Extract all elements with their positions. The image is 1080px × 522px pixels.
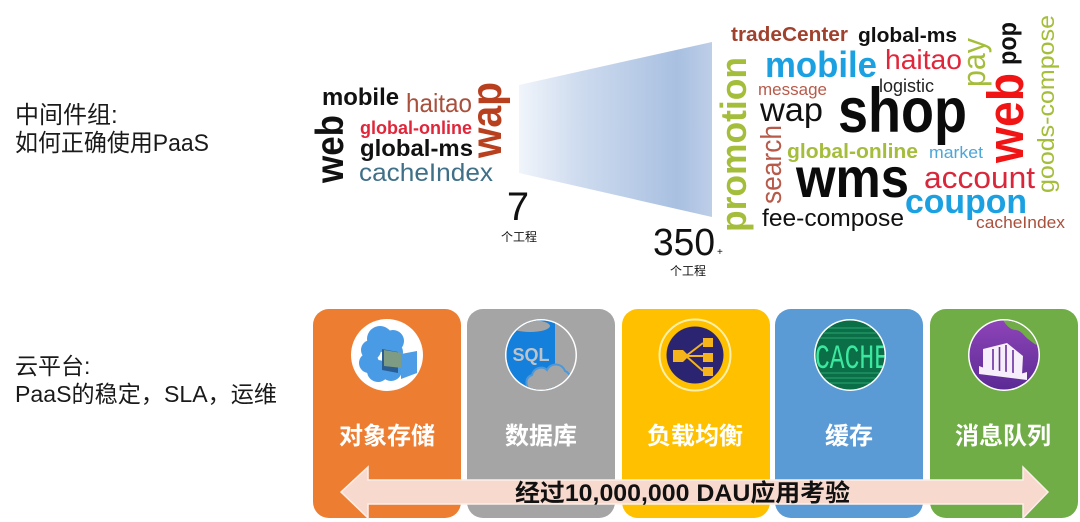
word cloud: 350+ projects: wms <box>795 146 909 209</box>
icon: SQL cloud <box>505 319 577 392</box>
word cloud: 350+ projects: message <box>758 80 827 99</box>
stat: 350+ projects: + <box>717 247 723 258</box>
heading: middleware group: 中间件组: <box>15 102 118 129</box>
heading: cloud platform <box>15 353 277 407</box>
stat: 7 projects <box>501 185 537 244</box>
label: message queue: 消息队列 <box>955 423 1051 450</box>
word cloud: 7 projects: cacheIndex <box>359 159 494 187</box>
word cloud: 350+ projects: promotion <box>713 57 754 232</box>
word cloud: 7 projects <box>309 82 511 187</box>
word cloud: 350+ projects: tradeCenter <box>731 24 848 46</box>
word cloud: 350+ projects: market <box>929 143 983 162</box>
heading: cloud platform: PaaS的稳定，SLA，运维 <box>15 381 277 407</box>
stat: 7 projects: 个工程 <box>501 229 537 244</box>
label: load balancing: 负载均衡 <box>647 423 743 450</box>
panel: load balancing <box>622 309 770 518</box>
icon: load balancer <box>660 320 730 390</box>
word cloud: 350+ projects: mobile <box>765 44 877 85</box>
word cloud: 7 projects: web <box>309 115 352 184</box>
word cloud: 350+ projects: goods-compose <box>1033 15 1059 193</box>
word cloud: 350+ projects: fee-compose <box>762 205 904 232</box>
icon: cloud storage <box>351 319 423 391</box>
panel: database <box>467 309 615 518</box>
word cloud: 350+ projects <box>713 15 1066 232</box>
heading: middleware group: 如何正确使用PaaS <box>15 130 209 157</box>
word cloud: 7 projects: global-ms <box>360 135 473 161</box>
word cloud: 7 projects: global-online <box>360 118 472 138</box>
icon: SQL cloud: SQL <box>512 345 550 365</box>
word cloud: 350+ projects: logistic <box>879 76 934 96</box>
heading: cloud platform: 云平台: <box>15 353 90 379</box>
word cloud: 350+ projects: global-online <box>787 141 918 163</box>
word cloud: 7 projects: haitao <box>406 88 472 118</box>
stat: 7 projects: 7 <box>507 185 529 229</box>
word cloud: 350+ projects: search <box>756 125 788 204</box>
double arrow with caption <box>341 467 1048 518</box>
word cloud: 350+ projects: pop <box>992 22 1022 65</box>
word cloud: 350+ projects: web <box>977 73 1034 164</box>
expansion trapezoid <box>519 42 712 217</box>
icon: message queue <box>968 319 1040 391</box>
icon: cache screen <box>814 319 889 391</box>
panel: message queue <box>930 309 1078 518</box>
icon: cache screen: CACHE <box>815 341 889 379</box>
word cloud: 7 projects: mobile <box>322 84 399 111</box>
stat: 350+ projects: 350 <box>653 222 715 264</box>
stat: 350+ projects: 个工程 <box>670 263 706 278</box>
panel: object storage <box>313 309 461 518</box>
panel: cache <box>775 309 923 518</box>
stat: 350+ projects <box>653 222 723 278</box>
word cloud: 7 projects: wap <box>463 82 511 159</box>
label: cache: 缓存 <box>825 423 873 450</box>
word cloud: 350+ projects: coupon <box>905 183 1027 221</box>
word cloud: 350+ projects: pay <box>956 38 992 87</box>
word cloud: 350+ projects: account <box>924 160 1035 195</box>
word cloud: 350+ projects: global-ms <box>858 25 957 47</box>
word cloud: 350+ projects: wap <box>759 91 823 128</box>
word cloud: 350+ projects: cacheIndex <box>976 213 1066 232</box>
label: database: 数据库 <box>505 423 577 450</box>
word cloud: 350+ projects: shop <box>838 76 967 146</box>
word cloud: 350+ projects: haitao <box>885 44 962 75</box>
label: object storage: 对象存储 <box>339 423 435 450</box>
double arrow with caption: 经过10,000,000 DAU应用考验 <box>515 479 850 507</box>
heading: middleware group <box>15 102 209 157</box>
